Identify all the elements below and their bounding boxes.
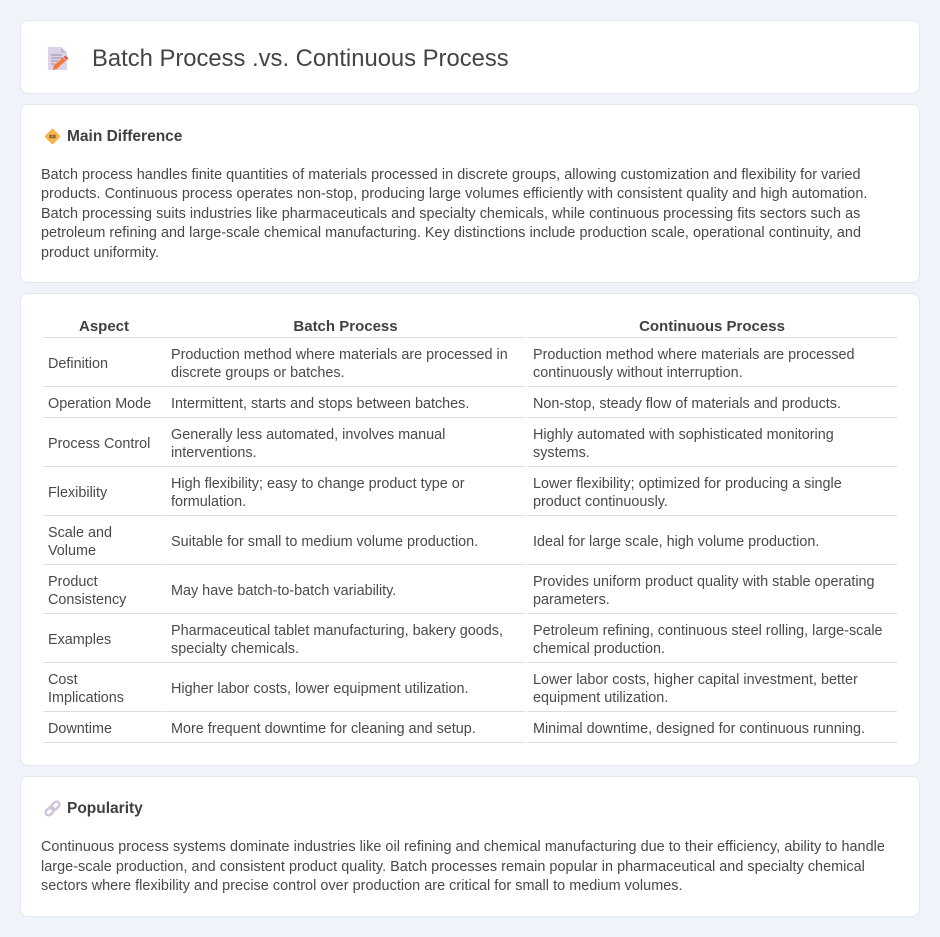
table row: downtime: Downtime [48, 721, 112, 737]
table row: downtime [43, 721, 897, 743]
icon: document with pencil [48, 47, 68, 70]
table row: examples: Pharmaceutical tablet manufacturing, bakery goods, [171, 623, 503, 639]
heading: popularity: Popularity [67, 800, 143, 817]
table row: product consistency: Provides uniform product quality with stable operating [533, 574, 875, 590]
panel: popularity [20, 776, 920, 917]
table header: continuous process: Continuous Process [639, 318, 785, 335]
table row: flexibility [43, 476, 897, 516]
table row: examples: specialty chemicals. [171, 641, 299, 657]
panel: comparison table [20, 293, 920, 766]
table header: continuous process [527, 317, 897, 338]
table row: cost implications: equipment utilization. [533, 690, 668, 706]
table row: downtime: Minimal downtime, designed for continuous running. [533, 721, 865, 737]
table row: definition: discrete groups or batches. [171, 365, 345, 381]
table header: aspect: Aspect [79, 318, 129, 335]
text block: main difference paragraph [41, 166, 867, 260]
table row: product consistency: parameters. [533, 592, 610, 608]
table row: cost implications: Higher labor costs, lower equipment utilization. [171, 681, 469, 697]
table row: process control: interventions. [171, 445, 257, 461]
table row: definition: Production method where materials are processed in [171, 347, 508, 363]
table row: process control: Process Control [48, 436, 150, 452]
table row: flexibility: product continuously. [533, 494, 668, 510]
icon: warning diamond [44, 128, 60, 144]
table row: process control: Generally less automated, involves manual [171, 427, 445, 443]
table row: examples: Petroleum refining, continuous steel rolling, large-scale [533, 623, 883, 639]
table row: downtime: More frequent downtime for cleaning and setup. [171, 721, 476, 737]
table row: definition: Production method where materials are processed [533, 347, 855, 363]
text block: popularity paragraph: large-scale production, and consistent product quality. Batch processes remain popular in pharmaceutical and specialty chemical [41, 858, 865, 874]
panel: main difference [20, 104, 920, 283]
table row: definition: continuously without interruption. [533, 365, 743, 381]
table header: batch process [166, 317, 525, 338]
heading: main difference: Main Difference [67, 128, 182, 145]
text block: main difference paragraph: product uniformity. [41, 244, 159, 260]
panel: title header [20, 20, 920, 94]
table row: operation mode [43, 396, 897, 418]
table row: process control [43, 427, 897, 467]
text block: main difference paragraph: Batch process handles finite quantities of materials processed in discrete groups, allowing customization and flexibility for varied [41, 166, 861, 182]
table row: operation mode: Non-stop, steady flow of materials and products. [533, 396, 841, 412]
table row: definition [43, 347, 897, 387]
table row: flexibility: High flexibility; easy to change product type or [171, 476, 465, 492]
table row: process control: Highly automated with sophisticated monitoring [533, 427, 834, 443]
text block: main difference paragraph: petroleum refining and large-scale chemical manufacturing. Key distinctions include production scale, operational continuity, and [41, 225, 861, 241]
text block: popularity paragraph: Continuous process systems dominate industries like oil refining and chemical manufacturing due to their efficiency, ability to handle [41, 839, 885, 855]
table row: flexibility: Lower flexibility; optimized for producing a single [533, 476, 842, 492]
table row: product consistency: Consistency [48, 592, 126, 608]
table row: flexibility: formulation. [171, 494, 246, 510]
table row: cost implications [43, 672, 897, 712]
text block: main difference paragraph: Batch processing suits industries like pharmaceuticals and specialty chemicals, while continuous processing fits sectors such as [41, 206, 860, 222]
table row: examples: chemical production. [533, 641, 665, 657]
table row: definition: Definition [48, 356, 108, 372]
table row: operation mode: Intermittent, starts and stops between batches. [171, 396, 469, 412]
table row: scale and volume [43, 525, 897, 565]
table row: flexibility: Flexibility [48, 485, 107, 501]
table row: product consistency: May have batch-to-batch variability. [171, 583, 396, 599]
table row: operation mode: Operation Mode [48, 396, 151, 412]
table row: scale and volume: Volume [48, 543, 96, 559]
table row: product consistency [43, 574, 897, 614]
text block: popularity paragraph [41, 839, 885, 894]
table row: cost implications: Lower labor costs, higher capital investment, better [533, 672, 858, 688]
table row: cost implications: Cost [48, 672, 78, 688]
table header: batch process: Batch Process [293, 318, 398, 335]
text block: main difference paragraph: products. Continuous process operates non-stop, producing large volumes efficiently with consistent quality and high automation. [41, 186, 867, 202]
table row: scale and volume: Ideal for large scale, high volume production. [533, 534, 819, 550]
table row: examples [43, 623, 897, 663]
icon: chain link [44, 800, 60, 817]
text block: popularity paragraph: sectors where flexibility and precise control over production are critical for small to medium volumes. [41, 878, 683, 894]
table row: scale and volume: Suitable for small to medium volume production. [171, 534, 478, 550]
table row: examples: Examples [48, 632, 111, 648]
table row: scale and volume: Scale and [48, 525, 112, 541]
table row: product consistency: Product [48, 574, 98, 590]
table row: cost implications: Implications [48, 690, 124, 706]
table row: process control: systems. [533, 445, 590, 461]
title: Batch Process .vs. Continuous Process [92, 45, 509, 72]
table header: aspect [43, 317, 165, 338]
